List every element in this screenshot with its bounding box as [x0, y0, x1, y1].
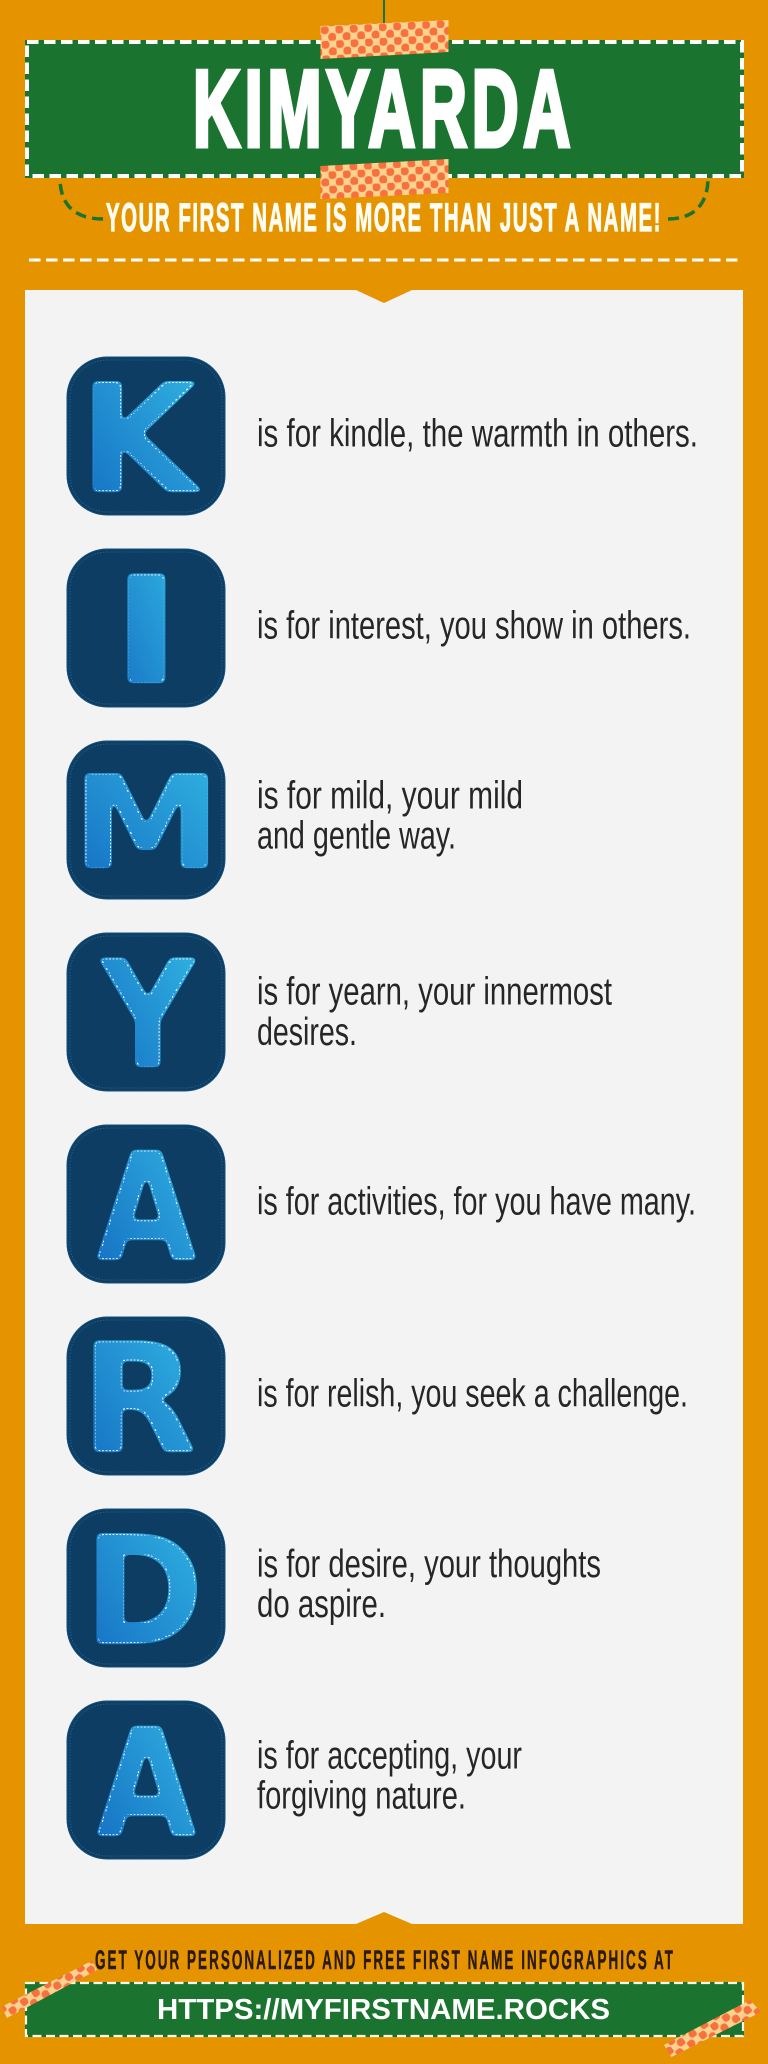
- tile A: [67, 1121, 225, 1296]
- text D: [257, 1543, 601, 1626]
- tile M: M: [71, 749, 222, 899]
- tile A2: A: [95, 1697, 198, 1872]
- row D: [67, 1504, 601, 1681]
- url banner: [25, 1982, 744, 2037]
- right connector: [668, 178, 708, 219]
- top tape: [320, 20, 448, 59]
- row Y: [67, 928, 612, 1103]
- text A2: forgiving nature.: [257, 1774, 466, 1818]
- text M: is for mild, your mild: [257, 774, 523, 818]
- text D: is for desire, your thoughts: [257, 1543, 601, 1586]
- text A2: is for accepting, your: [257, 1734, 522, 1778]
- url: HTTPS://MYFIRSTNAME.ROCKS: [157, 1994, 610, 2026]
- text Y: is for yearn, your innermost: [257, 970, 612, 1014]
- hanging string: [383, 0, 385, 26]
- panel: footer: [2, 1945, 761, 2057]
- tile Y: Y: [97, 928, 198, 1103]
- tile I: I: [109, 544, 184, 719]
- left tape: [2, 1961, 97, 2018]
- tile A2: [67, 1697, 225, 1872]
- text Y: [257, 970, 612, 1054]
- row R: [67, 1311, 688, 1489]
- row A2: [67, 1697, 522, 1872]
- bottom tape: [320, 159, 448, 199]
- tile A: A: [95, 1121, 198, 1296]
- row K: [67, 352, 698, 529]
- tile I: [67, 544, 225, 719]
- panel: header: [25, 0, 744, 240]
- text M: and gentle way.: [257, 814, 456, 858]
- text M: [257, 774, 523, 858]
- panel: letters: [25, 290, 743, 1924]
- title banner: [25, 40, 744, 178]
- row A: [67, 1121, 696, 1296]
- tile D: D: [83, 1504, 204, 1681]
- row I: [67, 544, 691, 719]
- tile R: R: [80, 1311, 198, 1489]
- tile K: K: [78, 352, 204, 529]
- right tape: [664, 2000, 761, 2057]
- row M: [67, 741, 523, 899]
- text A2: [257, 1734, 522, 1818]
- text D: do aspire.: [257, 1583, 386, 1626]
- tile Y: [67, 928, 225, 1103]
- left connector: [60, 178, 103, 219]
- text Y: desires.: [257, 1011, 357, 1054]
